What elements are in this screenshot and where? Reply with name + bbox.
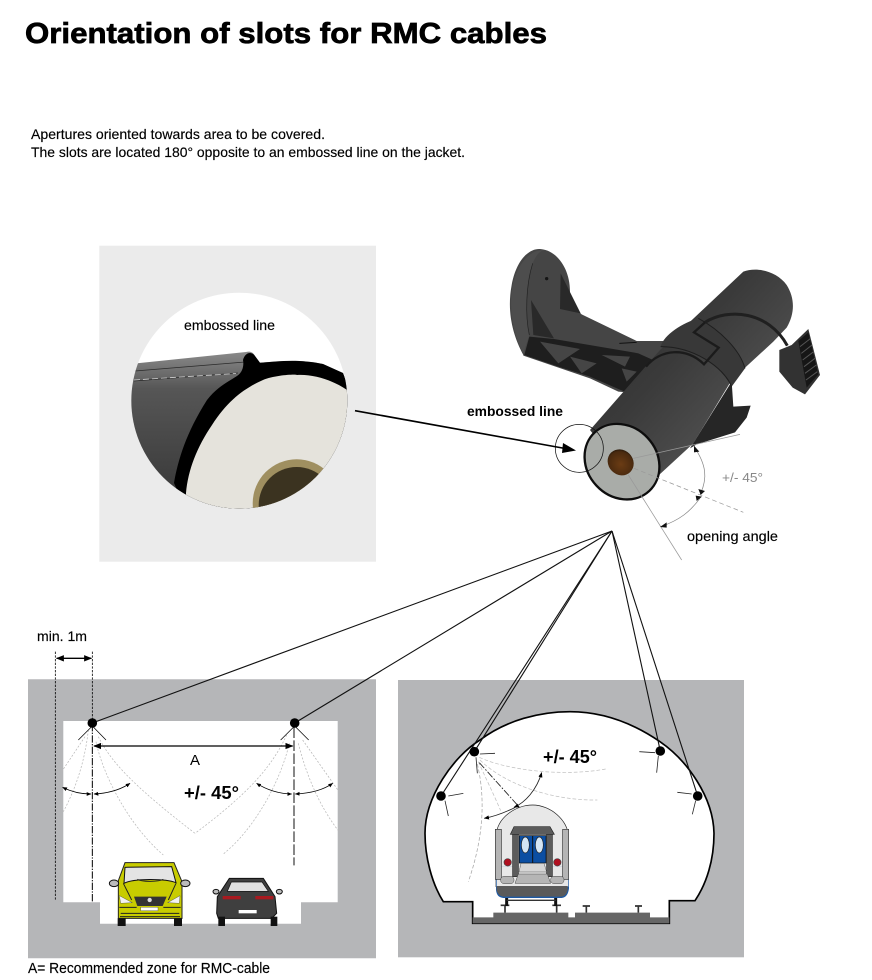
opening angle construction lines [628, 434, 743, 560]
road tunnel coverage diagram [55, 652, 338, 902]
label: opening angle: opening angle [687, 528, 778, 544]
cable and mounting bracket [510, 249, 820, 560]
magnifier circle [555, 424, 603, 472]
panel: rail tunnel [398, 680, 744, 957]
car: yellow van [109, 863, 190, 926]
track bed [473, 913, 669, 923]
label: opening angle value: +/- 45° [722, 470, 763, 485]
rails [501, 905, 642, 913]
intro text [31, 126, 465, 160]
collar on cable [661, 318, 745, 387]
cable position dots [88, 718, 702, 801]
panel: embossed line detail [99, 246, 376, 562]
car: dark saloon [213, 878, 282, 926]
strap [646, 322, 719, 367]
cable end face [569, 409, 675, 515]
dimension: A: A [190, 752, 200, 769]
cable runs fanning from cable end [92, 531, 698, 796]
tunnel bore outline [425, 712, 714, 923]
train front [495, 805, 569, 906]
arrow to embossed line [355, 411, 576, 453]
label: embossed line bold: embossed line [467, 403, 563, 419]
arrowheads on arc [660, 446, 705, 528]
magnified cable cross-section [131, 352, 348, 509]
dimension: min. 1m: min. 1m [37, 628, 87, 644]
label: +/- 45 degrees: +/- 45° [543, 747, 597, 767]
coverage fan [445, 752, 696, 882]
label: embossed line: embossed line [184, 317, 275, 333]
label: +/- 45 degrees: +/- 45° [184, 783, 239, 803]
strap tab [779, 329, 820, 394]
intro text: Apertures oriented towards area to be covered. [31, 126, 325, 142]
title: Orientation of slots for RMC cables [25, 18, 547, 50]
footnote: A= Recommended zone for RMC-cable [28, 961, 270, 977]
intro text: The slots are located 180° opposite to an embossed line on the jacket. [31, 144, 465, 160]
cable body [590, 270, 793, 495]
clip below cable [690, 382, 751, 448]
conductor hole [602, 444, 639, 481]
panel: road tunnel [28, 628, 376, 958]
